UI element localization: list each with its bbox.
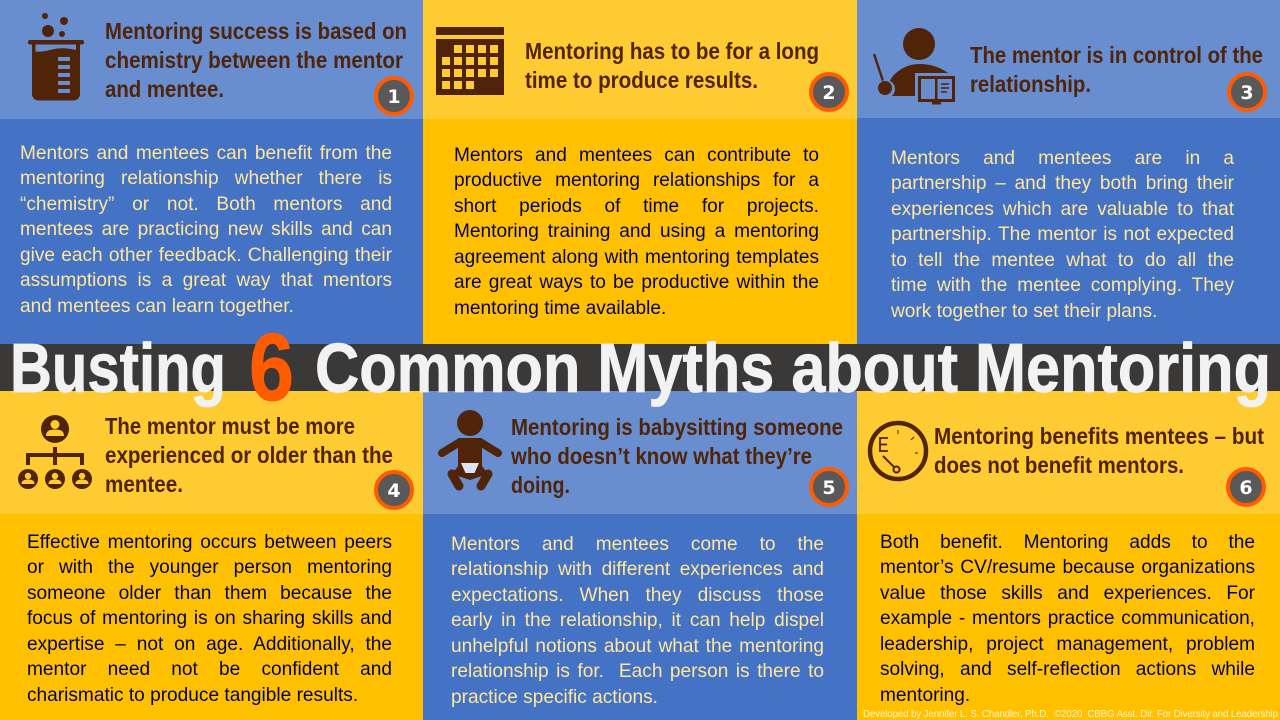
heading: myth 3 — [970, 42, 1263, 97]
text: myth 2 explanation: agreement along with mentoring templates — [454, 246, 819, 268]
text: myth 5 explanation: expectations. When they discuss those — [451, 584, 824, 606]
text: myth 3 explanation: to tell the mentee what to do all the — [891, 250, 1234, 270]
text: myth 6 explanation: leadership, project management, problem — [880, 634, 1255, 654]
text: myth 5 explanation: early in the relationship, it can help dispel — [451, 610, 824, 631]
text: myth 6 explanation: solving, and self-reflection actions while — [880, 659, 1255, 680]
text: myth 6 explanation: mentoring. — [880, 684, 970, 706]
text: myth 4 explanation: or with the younger person mentoring — [27, 557, 392, 578]
text: myth 4 explanation — [27, 532, 392, 706]
text: myth 5 explanation: Mentors and mentees come to the — [451, 534, 824, 554]
text: myth 2 explanation: short periods of time for projects. — [454, 196, 819, 216]
text: myth 1 explanation: “chemistry” or not. Both mentors and — [20, 194, 392, 214]
text: myth 3 explanation: experiences which are valuable to that — [891, 198, 1234, 220]
heading: myth 2 — [525, 38, 819, 93]
text: myth 6 explanation: Both benefit. Mentoring adds to the — [880, 532, 1255, 552]
text: myth 1 explanation: and mentees can learn together. — [20, 296, 294, 316]
badge: number 1 — [374, 76, 414, 116]
heading: myth 4: The mentor must be more — [105, 413, 355, 439]
text: myth 5 explanation: unhelpful notions about what the mentoring — [451, 636, 824, 656]
text: myth 1 explanation: Mentors and mentees can benefit from the — [20, 142, 392, 164]
text: myth 2 explanation: are great ways to be productive within the — [454, 272, 819, 293]
text: myth 2 explanation: Mentors and mentees can contribute to — [454, 144, 819, 166]
heading: myth 5: doing. — [511, 472, 570, 498]
text: myth 4 explanation: Effective mentoring occurs between peers — [27, 532, 392, 552]
badge: number 5 — [809, 467, 849, 507]
icon: beaker with bubbles — [28, 13, 84, 100]
text: myth 3 explanation: work together to set their plans. — [891, 300, 1157, 322]
text: myth 2 explanation — [454, 144, 819, 318]
credit line: Developed by Jennifer L. S. Chandler, Ph.D. ©2020 CBBG Asst. Dir. For Diversity and Leadership — [863, 709, 1279, 720]
text: myth 5 explanation: relationship is for. Each person is there to — [451, 661, 824, 682]
badge: number 3 — [1227, 72, 1267, 112]
panel: myth 1 — [0, 0, 423, 344]
heading: myth 2: time to produce results. — [525, 67, 758, 93]
text: myth 4 explanation: someone older than them because the — [27, 582, 392, 604]
text: myth 2 explanation: mentoring time available. — [454, 298, 666, 318]
title — [10, 325, 1271, 410]
text: myth 1 explanation: mentees are practicing new skills and can — [20, 219, 392, 240]
heading: myth 4: mentee. — [105, 471, 183, 497]
heading: myth 6 — [934, 423, 1264, 478]
icon: calendar — [436, 27, 504, 95]
badge: number 4 — [374, 470, 414, 510]
badge: number 6 — [1226, 467, 1266, 507]
icon: baby in diaper — [438, 410, 502, 490]
text: myth 6 explanation: example - mentors practice communication, — [880, 608, 1255, 629]
text: myth 4 explanation: focus of mentoring is on sharing skills and — [27, 608, 392, 629]
heading: myth 4 — [105, 413, 393, 497]
text: myth 3 explanation: partnership – and they both bring their — [891, 173, 1234, 194]
badge: number 3: 3 — [1240, 82, 1254, 104]
text: myth 6 explanation: mentor’s CV/resume because organizations — [880, 557, 1255, 578]
heading: myth 1: and mentee. — [105, 76, 224, 102]
text: myth 4 explanation: charismatic to produce tangible results. — [27, 684, 358, 706]
text: myth 5 explanation: relationship with different experiences and — [451, 559, 824, 580]
badge: number 1: 1 — [387, 86, 401, 108]
title band — [0, 344, 1280, 391]
text: myth 5 explanation: practice specific actions. — [451, 686, 658, 708]
text: myth 4 explanation: expertise – not on age. Additionally, the — [27, 634, 392, 654]
icon: org chart of people — [18, 415, 92, 489]
badge: number 4: 4 — [387, 480, 401, 502]
panel: myth 3 — [857, 0, 1280, 344]
text: myth 2 explanation: productive mentoring relationships for a — [454, 170, 819, 191]
panel 5 header — [423, 391, 857, 514]
panel: myth 2 — [423, 0, 857, 344]
text: myth 3 explanation — [891, 148, 1234, 322]
panel: myth 4 — [0, 391, 423, 720]
panel 6 header — [857, 391, 1280, 514]
panel: myth 5 — [423, 391, 857, 720]
panel 4 header — [0, 391, 423, 514]
text: myth 5 explanation — [451, 534, 824, 708]
text: myth 3 explanation: Mentors and mentees are in a — [891, 148, 1234, 168]
text: myth 1 explanation — [20, 142, 392, 316]
heading: myth 5: who doesn’t know what they’re — [510, 443, 812, 469]
badge: number 5: 5 — [822, 477, 836, 499]
panel 3 header — [857, 0, 1280, 118]
heading: myth 3: relationship. — [970, 71, 1091, 97]
text: myth 3 explanation: partnership. The mentor is not expected — [891, 224, 1234, 245]
badge: number 2: 2 — [822, 82, 836, 104]
icon: teacher with pointer and book — [872, 28, 955, 104]
heading: myth 6: does not benefit mentors. — [934, 452, 1184, 478]
text: myth 1 explanation: give each other feedback. Challenging their — [20, 244, 392, 266]
text: myth 6 explanation: value those skills and experiences. For — [880, 582, 1255, 604]
badge: number 2 — [809, 72, 849, 112]
text: myth 6 explanation — [880, 532, 1255, 706]
badge: number 6: 6 — [1239, 477, 1253, 499]
heading: myth 5 — [510, 414, 843, 498]
panel 2 header — [423, 0, 857, 119]
panel: myth 6 — [857, 391, 1280, 720]
panel 1 header — [0, 0, 423, 119]
title: Busting — [10, 329, 226, 407]
icon: empty fuel gauge — [868, 420, 928, 482]
text: myth 3 explanation: time with the mentee complying. They — [891, 275, 1234, 296]
heading: myth 1 — [105, 18, 407, 102]
text: myth 4 explanation: mentor need not be confident and — [27, 659, 392, 680]
text: myth 2 explanation: Mentoring training and using a mentoring — [454, 221, 819, 242]
text: myth 1 explanation: assumptions is a great way that mentors — [20, 270, 392, 291]
text: myth 1 explanation: mentoring relationship whether there is — [20, 168, 392, 189]
